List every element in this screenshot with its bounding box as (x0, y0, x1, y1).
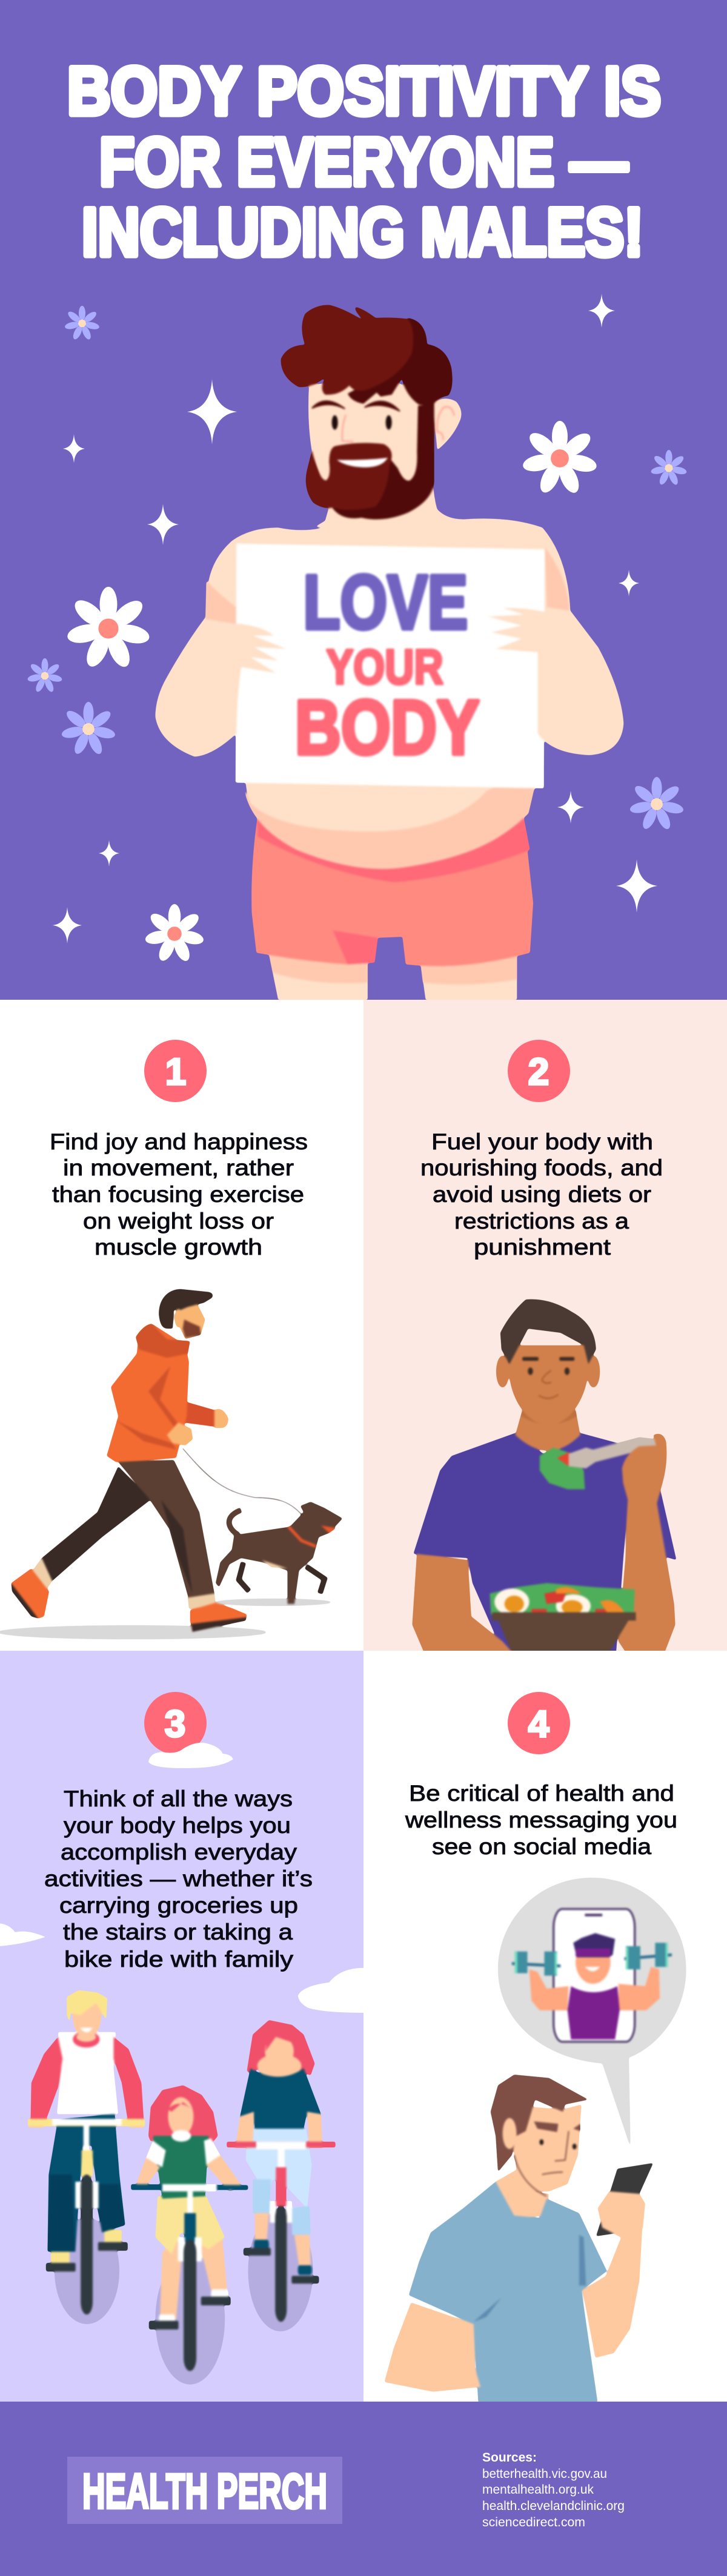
text: step 1: than focusing exercise (52, 1182, 304, 1207)
daughter (131, 2085, 248, 2371)
torso and arms (155, 507, 623, 869)
shirt (413, 1433, 677, 1652)
decorative flowers and sparkles (27, 294, 688, 963)
eyes and brows (522, 1357, 574, 1375)
text: step 1: Find joy and happiness (50, 1129, 308, 1154)
head: hair, face, beard (281, 305, 462, 533)
right arm (619, 1496, 676, 1652)
panel 3 background (0, 1651, 364, 2402)
text: step 2: punishment (474, 1235, 611, 1260)
illustration: man holding sign (155, 305, 623, 1000)
beard dark (332, 404, 434, 520)
neck (496, 2170, 549, 2218)
father (28, 1990, 145, 2314)
number badge 2: 2 (528, 1051, 549, 1093)
panel 1 background (0, 1000, 364, 1651)
head (159, 1289, 213, 1339)
dog (216, 1502, 343, 1604)
text: step 3 (44, 1786, 313, 1972)
number badge 1: 1 (165, 1051, 186, 1093)
number badge 4 (508, 1692, 570, 1754)
right sleeve and hand (183, 1402, 228, 1428)
ear (503, 2118, 517, 2149)
mother (227, 2020, 336, 2322)
nose (342, 415, 353, 441)
salad (490, 1583, 635, 1617)
title: FOR EVERYONE — (99, 124, 628, 200)
illustration: man eating salad (412, 1299, 677, 1653)
phone on screen (554, 1909, 635, 2042)
sign text: BODY (295, 684, 479, 770)
hair dark (348, 318, 453, 406)
text: step 3: accomplish everyday (61, 1840, 297, 1864)
hood and folds (116, 1324, 190, 1450)
shirt (409, 2182, 607, 2402)
hair light (281, 305, 413, 395)
illustration: man running with dog (0, 1289, 343, 1639)
sources: mentalhealth.org.uk (482, 2483, 594, 2497)
neck (516, 1410, 580, 1451)
leash (182, 1447, 301, 1514)
text: step 1: on weight loss or (83, 1209, 274, 1234)
panel: footer (0, 2402, 727, 2576)
number badge 1 (144, 1040, 207, 1102)
number badge 3: 3 (165, 1703, 185, 1745)
front leg (118, 1460, 214, 1600)
number badge 4: 4 (528, 1703, 549, 1745)
ears (496, 1356, 600, 1387)
face (512, 2104, 582, 2191)
mouth (337, 458, 388, 467)
illustration: man viewing phone with speech bubble (384, 1878, 686, 2402)
text: step 3: activities — whether it’s (44, 1866, 313, 1891)
sources (482, 2451, 625, 2529)
left arm and fingers (155, 624, 286, 755)
fork (569, 1437, 657, 1468)
sign text: YOUR (327, 639, 443, 694)
left arm (412, 1554, 512, 1652)
number badge 3 (144, 1692, 207, 1754)
text: step 3: the stairs or taking a (63, 1920, 293, 1944)
text: step 3: bike ride with family (64, 1947, 294, 1972)
text: step 4: Be critical of health and (409, 1781, 674, 1806)
logo box (67, 2457, 342, 2524)
hand (597, 2191, 645, 2242)
sources: Sources: (482, 2451, 537, 2465)
panel 2 background (364, 1000, 727, 1651)
front hand (167, 1422, 193, 1445)
text: step 1: muscle growth (95, 1235, 262, 1260)
number badge 2 (508, 1040, 570, 1102)
hoodie (107, 1324, 189, 1462)
text: step 2: nourishing foods, and (420, 1155, 663, 1180)
man's phone (596, 2163, 653, 2236)
left arm (384, 2302, 480, 2392)
panel: hero background (0, 0, 727, 1000)
ground shadows (0, 1599, 331, 1639)
hand (622, 1434, 666, 1508)
text: step 2 (420, 1129, 663, 1260)
illustration: clouds (0, 1743, 364, 2013)
bowl (492, 1613, 636, 1653)
sources: health.clevelandclinic.org (482, 2499, 625, 2513)
beard light (306, 443, 392, 510)
eyes (332, 415, 392, 430)
sign text: LOVE (304, 560, 468, 645)
speech bubble (498, 1878, 686, 2148)
tomato (557, 1451, 570, 1466)
text: step 1 (50, 1129, 308, 1260)
ear (433, 398, 462, 450)
fitness figure (529, 1933, 660, 2039)
logo box: HEALTH PERCH (82, 2464, 327, 2519)
text: step 2: Fuel your body with (431, 1129, 653, 1154)
title (67, 53, 661, 270)
shoes (11, 1568, 247, 1632)
brows and eyes (534, 2121, 580, 2150)
shirt shadows (474, 2235, 586, 2322)
lettuce on fork (540, 1447, 585, 1489)
text: step 1: in movement, rather (63, 1155, 294, 1180)
title: INCLUDING MALES! (82, 194, 643, 270)
face (308, 375, 434, 483)
shorts (251, 818, 533, 966)
neck (315, 483, 448, 533)
text: step 3: carrying groceries up (59, 1893, 298, 1918)
nose, mouth and jaw lines (514, 2131, 569, 2196)
sources: sciencedirect.com (482, 2515, 585, 2529)
right arm and fingers (488, 608, 623, 755)
panel 4 background (364, 1651, 727, 2402)
text: step 3: your body helps you (64, 1813, 291, 1838)
text: step 2: restrictions as a (454, 1209, 629, 1234)
text: step 3: Think of all the ways (64, 1786, 293, 1811)
hair (500, 1299, 596, 1364)
sign board (236, 544, 545, 788)
wheel shadows (55, 2211, 313, 2385)
text: step 4: wellness messaging you (405, 1808, 677, 1832)
text: step 4 (405, 1781, 677, 1859)
hair (491, 2075, 588, 2172)
brows (312, 401, 400, 411)
sources: betterhealth.vic.gov.au (482, 2467, 607, 2481)
smile (539, 1370, 558, 1398)
text: step 2: avoid using diets or (433, 1182, 651, 1207)
illustration: family cycling (28, 1990, 336, 2385)
sign text (295, 560, 479, 770)
right arm (583, 2218, 643, 2358)
text: step 4: see on social media (432, 1834, 651, 1859)
socks (33, 1558, 216, 1609)
legs (268, 949, 517, 1000)
dumbbells (512, 1943, 672, 1976)
face (508, 1346, 588, 1425)
title: BODY POSITIVITY IS (67, 53, 661, 129)
back leg (42, 1466, 151, 1581)
